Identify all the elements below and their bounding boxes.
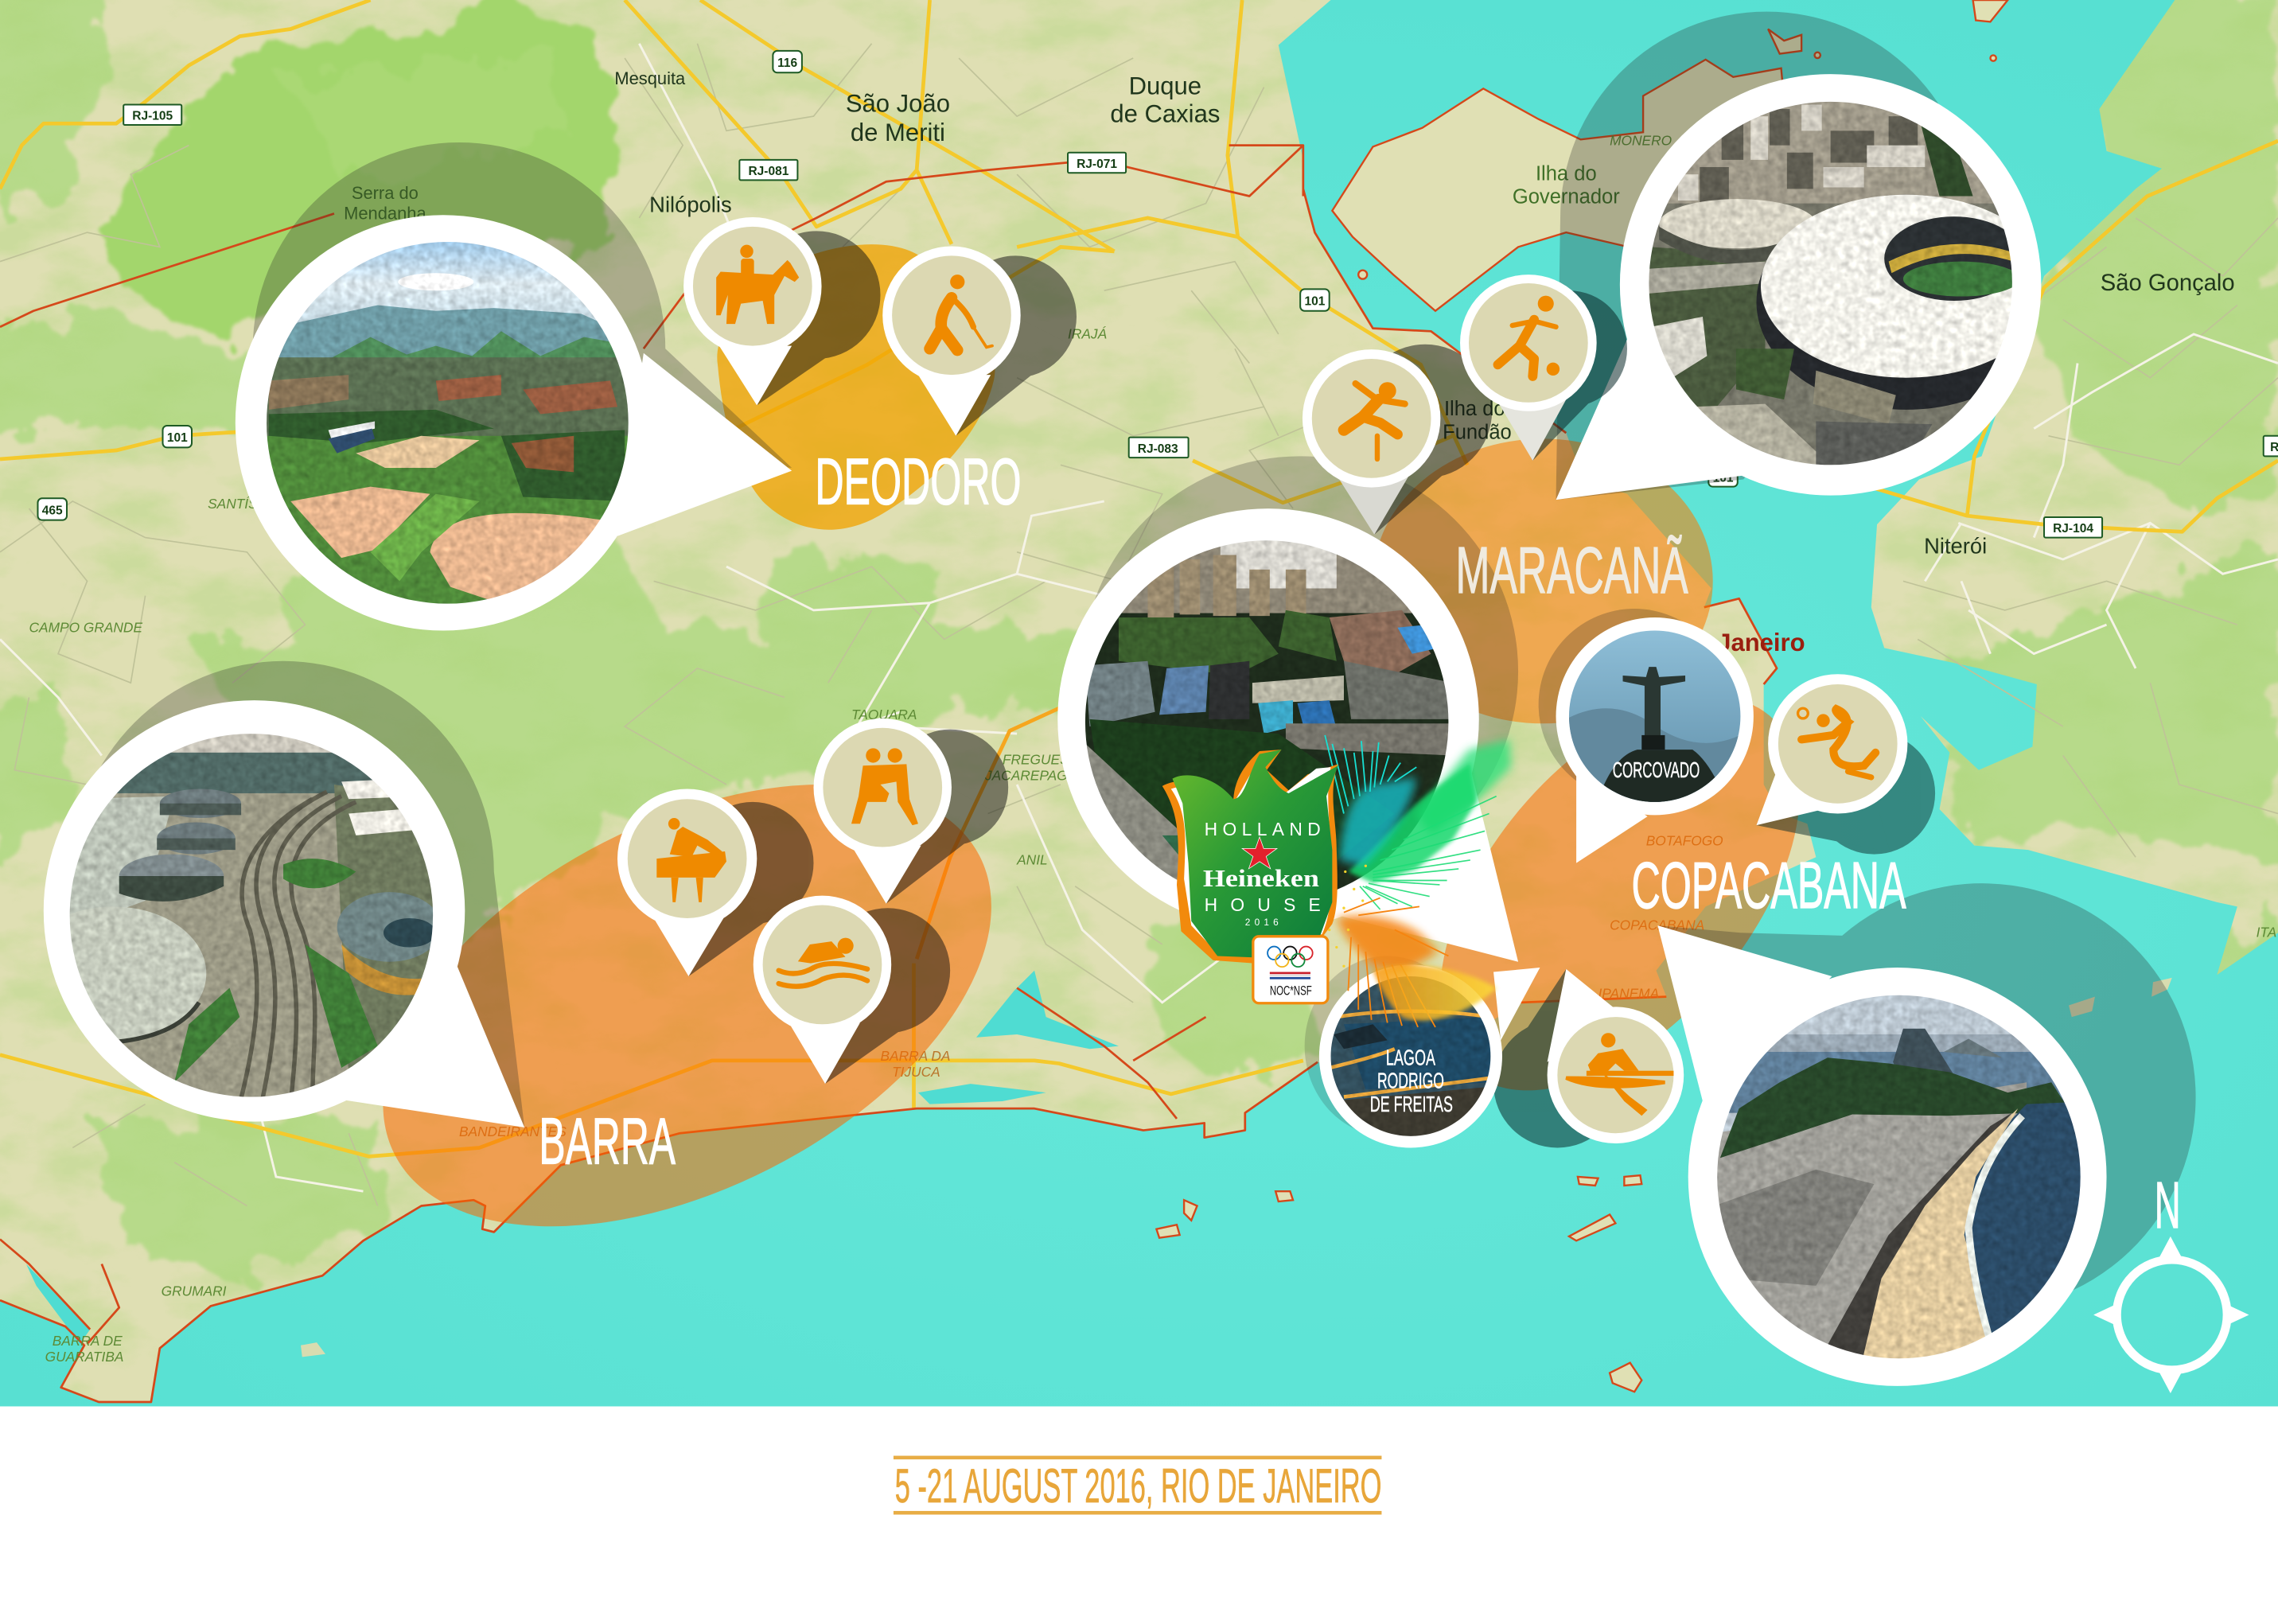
road shields <box>37 51 2278 538</box>
map place labels: IPANEMA <box>1598 985 1659 1001</box>
pin: rowing <box>1493 969 1684 1147</box>
map place labels: GUARATIBA <box>45 1349 123 1365</box>
map place labels: CAMPO GRANDE <box>29 619 142 635</box>
road shields: RJ-083 <box>1138 442 1178 456</box>
icon: water polo player <box>1798 708 1875 777</box>
pin: wrestling <box>813 719 1008 904</box>
photo: Lagoa night <box>1330 973 1492 1147</box>
shadow: Maracanã callout <box>1556 12 1973 500</box>
area blob: Copacabana <box>1370 632 1870 1155</box>
callout: Corcovado <box>1556 617 1754 863</box>
feather: teal <box>1325 735 1416 866</box>
map place labels: Mesquita <box>614 68 686 88</box>
shadow: Corcovado callout <box>1539 609 1731 800</box>
area blob: Barra <box>312 693 1063 1318</box>
feather: green <box>1348 739 1511 909</box>
logo: Holland Heineken House <box>1162 750 1338 1003</box>
map place labels: GRUMARI <box>162 1283 227 1299</box>
map place labels: Duque <box>1129 72 1201 100</box>
map place labels: ITA <box>2257 925 2276 941</box>
feather: orange <box>1337 898 1448 1027</box>
dark green mountain: Serra do Mendanha <box>99 0 610 333</box>
logo text: 2016: 2016 <box>1245 917 1279 928</box>
pin: hurdles <box>1303 345 1492 535</box>
map place labels: FREGUESIA <box>1003 751 1082 767</box>
map place labels: Niterói <box>1924 534 1987 559</box>
label: Copacabana: COPACABANA <box>1631 850 1906 922</box>
label: Maracanã: MARACANÃ <box>1456 535 1688 607</box>
island: Ilha do Governador <box>1332 60 1787 311</box>
icon: rower <box>1566 1033 1673 1116</box>
shadow: Barra callout <box>72 661 524 1127</box>
label: Lagoa Rodrigo de Freitas: LAGOA <box>1386 1045 1435 1069</box>
logo text: House: HOUSE <box>1205 894 1321 915</box>
footer date line: 5 -21 AUGUST 2016, RIO DE JANEIRO <box>895 1458 1381 1513</box>
label: Barra: BARRA <box>539 1106 676 1178</box>
compass <box>2093 1170 2249 1393</box>
icon: hockey player <box>930 275 992 350</box>
photo: Holland Heineken House aerial <box>1082 538 1453 908</box>
logo: NOC NSF box <box>1253 937 1328 1003</box>
small islands <box>301 0 2172 1392</box>
pin: hockey <box>882 246 1077 436</box>
lagoons <box>26 971 1119 1344</box>
compass letter N: N <box>2155 1170 2181 1242</box>
callout: Barra <box>21 700 524 1127</box>
shadow: Holland callout <box>1082 456 1518 886</box>
map place labels: Ilha do <box>1536 162 1597 185</box>
callout: Holland Heineken House venue <box>1057 508 1518 962</box>
label: Lagoa Rodrigo de Freitas <box>1370 1045 1453 1116</box>
area blob: Deodoro <box>717 244 995 530</box>
pin: swimming <box>753 896 950 1084</box>
label: Deodoro: DEODORO <box>815 446 1022 519</box>
shadow: Lagoa callout <box>1305 956 1470 1136</box>
map place labels: MONERO <box>1610 133 1672 149</box>
map place labels: Nilópolis <box>649 193 732 217</box>
photo: Maracanã stadium <box>1641 95 2056 480</box>
logo: NOC NSF box: NOC*NSF <box>1270 984 1312 999</box>
road shields: 101 <box>1713 471 1734 485</box>
photo: Deodoro equestrian park <box>262 240 633 610</box>
feathers <box>1318 735 1511 1027</box>
icon: horse rider <box>716 245 799 324</box>
photo: Corcovado statue <box>1566 628 1743 814</box>
road shields: 116 <box>777 56 798 70</box>
shadow: Deodoro callout <box>253 142 792 468</box>
road shields: RJ-104 <box>2053 522 2093 535</box>
label: Corcovado: CORCOVADO <box>1613 757 1700 782</box>
callout: Maracanã <box>1556 74 2056 500</box>
map place labels: Ilha do <box>1444 398 1505 420</box>
map place labels <box>29 68 2276 1365</box>
photo: Copacabana beach <box>1715 988 2092 1365</box>
map place labels: COPACABANA <box>1610 917 1704 933</box>
icon: football player <box>1497 296 1560 376</box>
icon: gymnast on pommel horse <box>656 818 726 902</box>
map place labels: BOTAFOGO <box>1646 833 1723 849</box>
map place labels: SANTÍSSIMO <box>208 496 293 512</box>
map place labels: IRAJÁ <box>1068 325 1107 341</box>
road shields: 101 <box>167 431 188 445</box>
map place labels: Fundão <box>1443 421 1512 443</box>
map place labels: BARRA DA <box>880 1048 950 1064</box>
road shields: 465 <box>42 504 63 517</box>
map place labels: Janeiro <box>1717 629 1805 656</box>
map place labels: de Caxias <box>1110 99 1220 127</box>
logo text: Heineken: Heineken <box>1203 864 1319 892</box>
map place labels: São Gonçalo <box>2101 271 2235 296</box>
map place labels: Governador <box>1513 186 1620 208</box>
feather: yellow <box>1373 965 1497 1021</box>
label: Lagoa Rodrigo de Freitas: RODRIGO <box>1377 1069 1444 1093</box>
map place labels: TIJUCA <box>892 1064 940 1080</box>
road shields: RJ-105 <box>132 110 173 123</box>
callout: Copacabana <box>1657 925 2107 1386</box>
shadow: Copacabana callout <box>1657 883 2196 1290</box>
pin: equestrian <box>683 217 880 405</box>
map place labels: JACAREPAGUÁ <box>984 768 1087 784</box>
map place labels: São João <box>846 90 950 118</box>
callout: Lagoa Rodrigo de Freitas <box>1319 964 1540 1147</box>
callout: Deodoro <box>236 215 792 630</box>
logo text: Holland: HOLLAND <box>1205 819 1321 839</box>
map place labels: BARRA DE <box>53 1333 123 1349</box>
map place labels: BANDEIRANTES <box>459 1124 567 1139</box>
map place labels: ANIL <box>1016 851 1048 867</box>
pin: water polo <box>1757 674 1935 855</box>
road shields: RJ-081 <box>748 165 789 178</box>
logo star <box>1242 837 1277 869</box>
label: Lagoa Rodrigo de Freitas: DE FREITAS <box>1370 1092 1453 1116</box>
sparkles <box>1318 865 1367 968</box>
road shields: RJ-071 <box>1077 158 1117 171</box>
road shields: 101 <box>1304 294 1326 308</box>
pin: football <box>1460 275 1627 461</box>
map place labels: de Meriti <box>851 119 945 146</box>
area blob: Maracanã <box>1373 438 1713 723</box>
map place labels: Mendanha <box>344 204 426 224</box>
pin: gymnastics <box>617 789 813 976</box>
map place labels: TAQUARA <box>851 707 917 722</box>
map place labels: Serra do <box>352 183 419 203</box>
icon: swimmer <box>779 938 867 987</box>
icon: wrestlers <box>851 748 918 825</box>
icon: hurdler <box>1344 382 1405 459</box>
photo: Barra Olympic park <box>21 726 443 1104</box>
footer date line <box>894 1456 1381 1515</box>
